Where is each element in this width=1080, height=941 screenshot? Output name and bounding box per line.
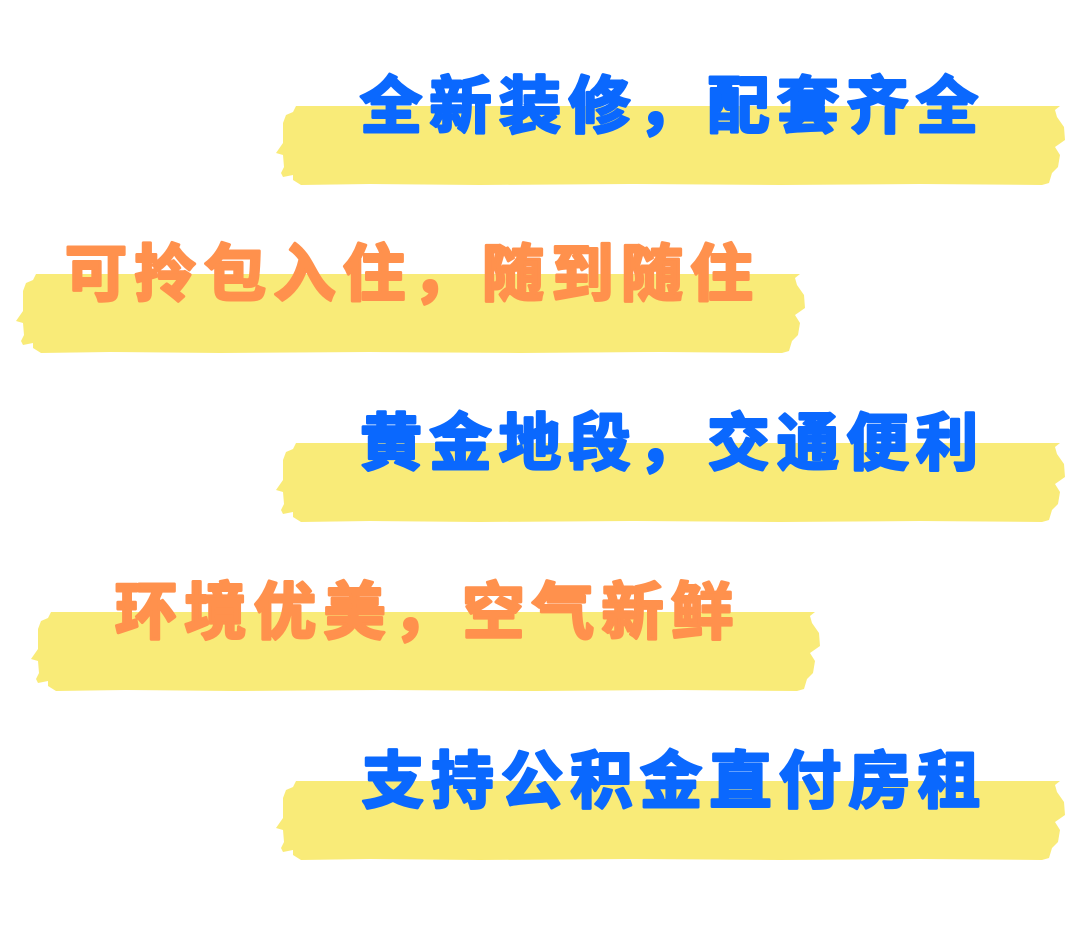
yellow brush band bbox=[276, 443, 1065, 522]
yellow brush band bbox=[276, 106, 1065, 185]
row 5: housing fund rent payment bbox=[276, 748, 1065, 860]
slogan text: 全新装修，配套齐全 bbox=[360, 72, 986, 142]
slogan text: 环境优美，空气新鲜 bbox=[115, 578, 741, 648]
yellow brush band bbox=[31, 612, 820, 691]
slogan text: 可拎包入住，随到随住 bbox=[65, 240, 760, 310]
slogan text: 黄金地段，交通便利 bbox=[360, 410, 986, 478]
yellow brush band bbox=[16, 274, 805, 353]
row 2: move in ready bbox=[16, 240, 805, 353]
row 3: location and transport bbox=[276, 410, 1065, 522]
row 4: environment and air bbox=[31, 578, 820, 691]
row 1: renovation and furnishings bbox=[276, 72, 1065, 185]
yellow brush band bbox=[276, 781, 1065, 860]
slogan text: 支持公积金直付房租 bbox=[362, 748, 988, 816]
